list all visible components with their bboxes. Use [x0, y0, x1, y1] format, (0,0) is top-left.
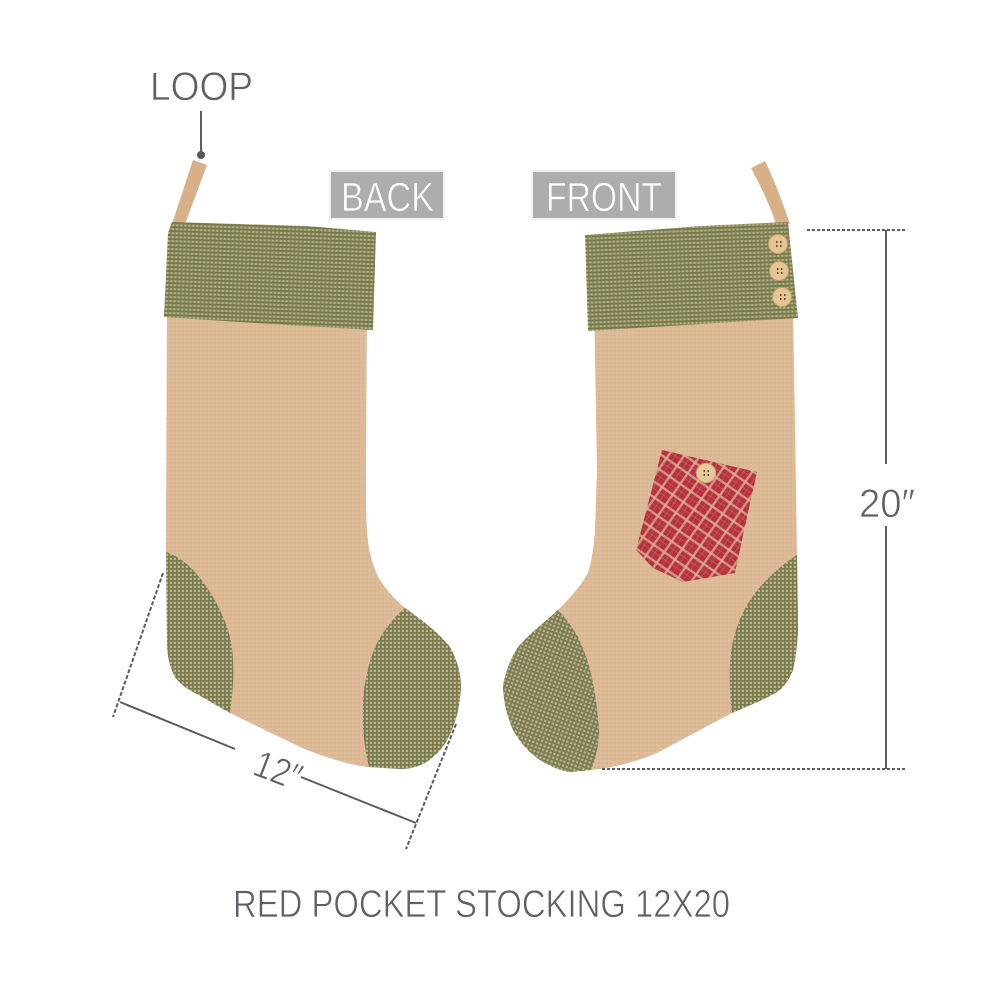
- width dimension 12 inches: [113, 573, 456, 849]
- back cuff: [164, 222, 376, 330]
- front body: [503, 300, 798, 772]
- front stocking: [503, 161, 798, 772]
- width dimension 12 inches: 12″: [248, 743, 308, 800]
- front cuff: [585, 222, 798, 331]
- pocket button: [696, 463, 716, 483]
- loop label: LOOP: [150, 65, 253, 109]
- back label: BACK: [341, 174, 434, 220]
- height dimension 20 inches: 20″: [859, 482, 915, 526]
- front toe patch: [503, 610, 599, 772]
- back loop: [172, 160, 207, 224]
- back stocking: [164, 160, 461, 769]
- front heel patch: [730, 555, 798, 713]
- back body: [166, 300, 461, 769]
- caption: RED POCKET STOCKING 12X20: [233, 883, 730, 926]
- back heel patch: [166, 552, 233, 713]
- cuff buttons: [768, 234, 792, 306]
- red pocket: [636, 450, 757, 582]
- back toe patch: [363, 608, 461, 769]
- front label: FRONT: [546, 174, 662, 220]
- loop label: [150, 65, 253, 159]
- front loop: [751, 161, 790, 224]
